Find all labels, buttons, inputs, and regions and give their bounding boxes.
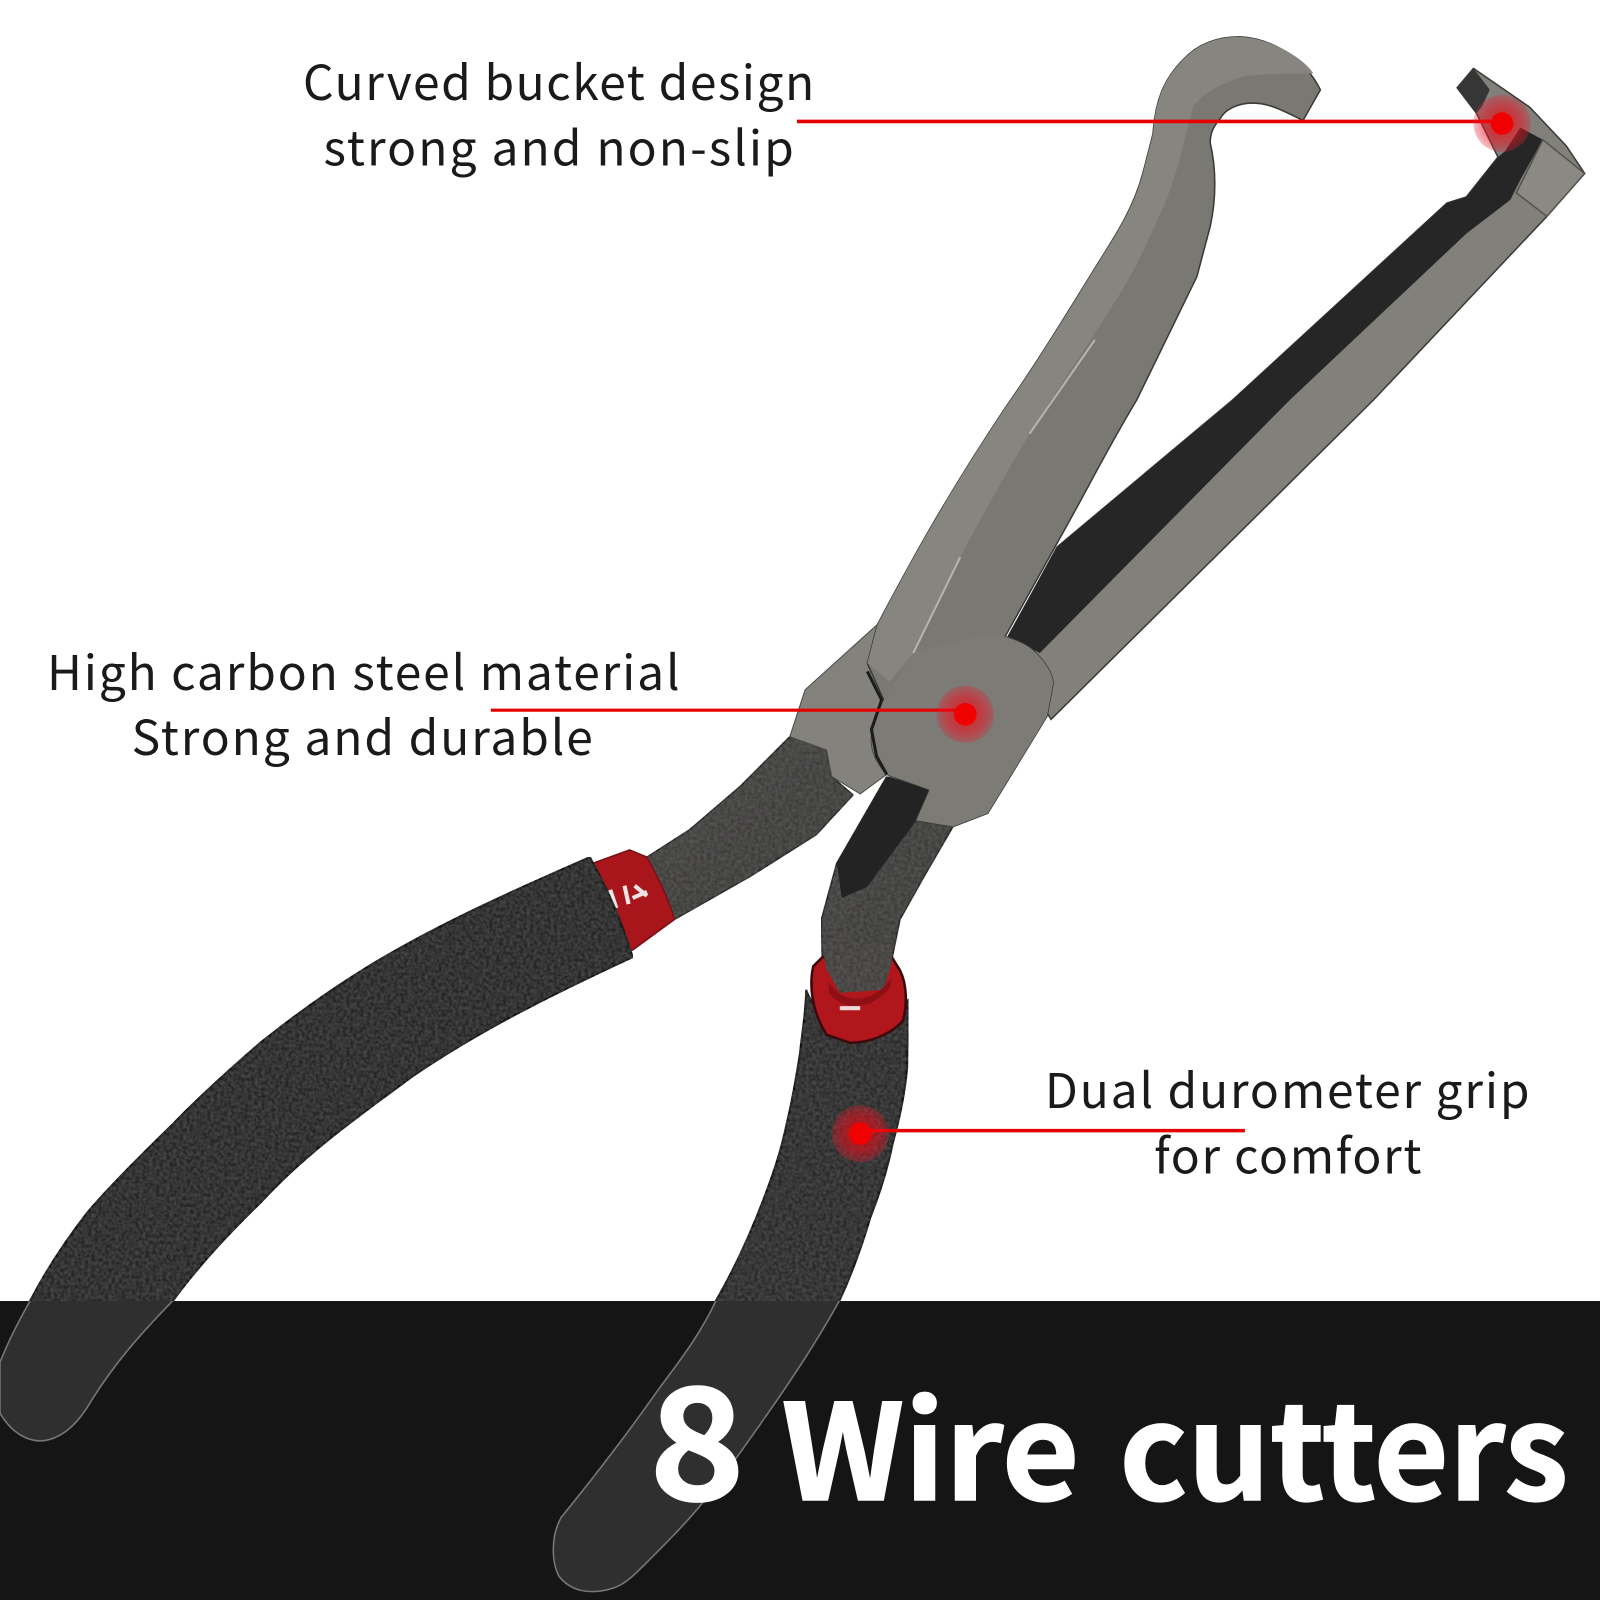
callout: high carbon steel: Strong and durable — [132, 699, 593, 769]
callout: dual durometer grip: for comfort — [1154, 1117, 1421, 1187]
left wing of pivot — [790, 622, 898, 794]
hotspot: grip — [832, 1105, 889, 1162]
leader line: curved bucket — [797, 120, 1502, 123]
title: Wire — [782, 1347, 1080, 1539]
pivot plate shade — [871, 635, 1053, 827]
highlight lines on arm — [913, 340, 1095, 653]
slit between jaws — [867, 671, 887, 774]
title: 8 — [649, 1321, 745, 1545]
black title band — [0, 1301, 1600, 1600]
callout: dual durometer grip — [1045, 1052, 1530, 1187]
outer lighter facet of hook arm — [867, 37, 1313, 682]
leader line: steel material — [491, 709, 965, 712]
left grip — [0, 857, 633, 1441]
right grip — [553, 990, 908, 1592]
lower-left stem — [647, 737, 853, 919]
left red collar — [582, 850, 674, 954]
callout: curved bucket design: strong and non-slip — [323, 109, 794, 179]
title: cutters — [1119, 1347, 1568, 1539]
leader line: grip — [860, 1129, 1245, 1132]
hotspot: curved bucket — [1473, 95, 1531, 152]
callout: dual durometer grip: Dual durometer grip — [1045, 1052, 1530, 1122]
hook arm and pivot plate — [867, 37, 1320, 827]
callout: high carbon steel — [47, 634, 680, 769]
callout: curved bucket design: Curved bucket design — [303, 44, 814, 114]
title — [649, 1321, 1568, 1545]
callout: curved bucket design — [303, 44, 814, 179]
straight jaw arm — [1005, 68, 1585, 719]
hotspot: steel material — [937, 686, 994, 743]
right red collar — [811, 944, 906, 1043]
lower-right stem — [821, 777, 953, 969]
callout: high carbon steel: High carbon steel material — [47, 634, 680, 704]
